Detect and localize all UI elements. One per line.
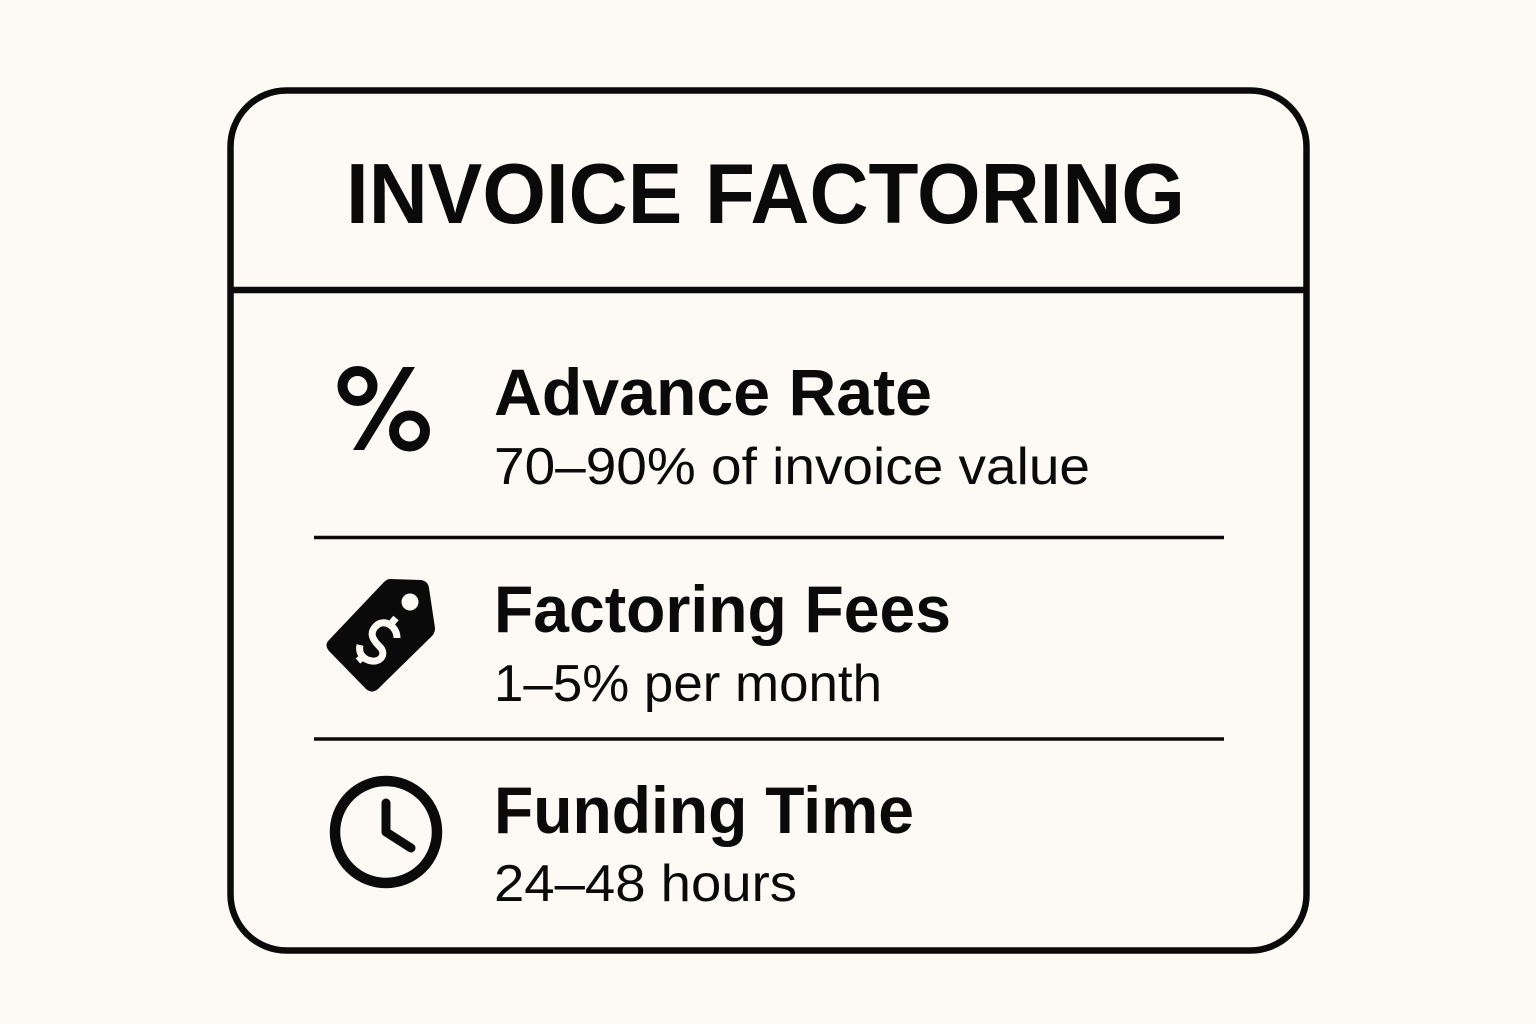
row: funding time (335, 773, 914, 913)
icon: percent (342, 367, 425, 450)
heading: advance rate: Advance Rate (494, 355, 932, 429)
text: factoring fees value: 1–5% per month (494, 655, 882, 713)
text: advance rate value: 70–90% of invoice value (494, 438, 1090, 496)
panel: invoice factoring card (230, 90, 1306, 950)
row: advance rate (342, 355, 1090, 496)
row: factoring fees (326, 572, 951, 713)
heading: factoring fees: Factoring Fees (494, 572, 951, 646)
title: INVOICE FACTORING (346, 147, 1185, 242)
icon: price tag with dollar sign (326, 579, 435, 692)
icon: clock (335, 781, 437, 883)
text: funding time value: 24–48 hours (494, 855, 797, 913)
heading: funding time: Funding Time (494, 773, 914, 847)
